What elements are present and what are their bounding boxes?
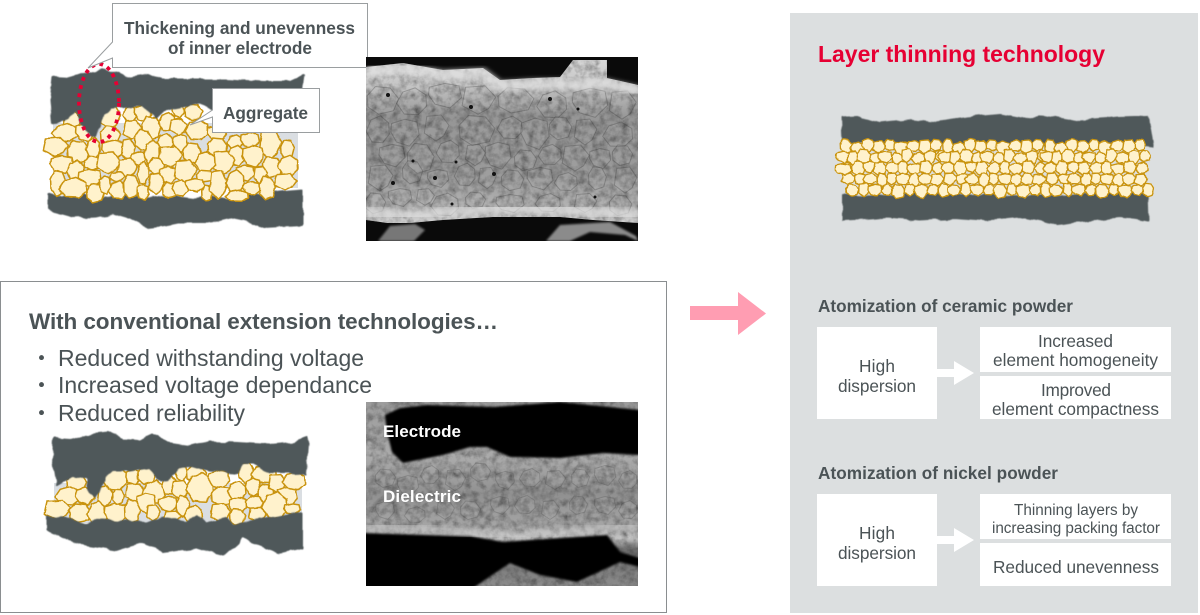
callout: thickening and unevenness	[88, 4, 368, 68]
upper electrode	[53, 433, 308, 497]
box: packing factor: Thinning layers by	[1014, 502, 1138, 519]
callout: aggregate: Aggregate	[223, 103, 308, 123]
panel: conventional extension technologies	[0, 282, 666, 612]
red dotted ellipse	[79, 64, 119, 142]
callout: thickening and unevenness: of inner electrode	[168, 38, 312, 58]
box: element homogeneity	[980, 327, 1171, 372]
box: high dispersion: dispersion	[838, 543, 916, 563]
panel: layer thinning technology	[790, 13, 1198, 613]
box: high dispersion	[817, 494, 937, 586]
diagram: thin layer with conventional technology	[44, 433, 308, 555]
heading: With conventional extension technologies…	[29, 309, 498, 334]
white arrow	[937, 361, 974, 385]
bullet list: Reduced reliability	[58, 400, 246, 426]
box: element compactness: Improved	[1041, 380, 1111, 400]
label: Electrode: Electrode	[383, 422, 461, 441]
lower black electrode area	[364, 533, 640, 588]
diagram: thick dielectric with aggregate	[43, 64, 303, 227]
section: nickel powder	[817, 463, 1171, 586]
lower electrode	[50, 190, 302, 227]
upper electrode with protrusion	[51, 70, 303, 135]
ceramic grains	[43, 104, 298, 202]
bullet list: ・	[30, 400, 53, 426]
diagram: thinned layer	[835, 115, 1154, 224]
callout: aggregate	[190, 88, 320, 132]
box: element homogeneity: Increased	[1038, 331, 1113, 351]
box: element homogeneity: element homogeneity	[993, 350, 1158, 370]
ceramic grains	[44, 462, 305, 525]
bullet list	[30, 345, 372, 426]
white arrow	[937, 528, 974, 552]
title: Layer thinning technology	[818, 41, 1105, 67]
dielectric background	[54, 483, 302, 523]
box: packing factor	[980, 494, 1171, 539]
upper black electrode area	[385, 402, 640, 463]
box: high dispersion: dispersion	[838, 376, 916, 396]
box: element compactness	[980, 376, 1171, 419]
box: high dispersion	[817, 327, 937, 419]
arrow	[690, 292, 766, 335]
callout: thickening and unevenness: Thickening and unevenness	[124, 18, 355, 38]
label: Dielectric: Dielectric	[383, 487, 461, 506]
micrograph: conventional layer with labels	[364, 402, 640, 588]
dielectric background	[53, 123, 298, 188]
box: packing factor: increasing packing factor	[992, 520, 1160, 537]
box: high dispersion: High	[859, 356, 895, 376]
micrograph: conventional dielectric layer	[365, 57, 638, 241]
bullet list: Increased voltage dependance	[58, 372, 372, 398]
bullet list: ・	[30, 372, 53, 398]
bullet list: ・	[30, 345, 53, 371]
ceramic grains	[835, 139, 1154, 198]
section: nickel powder: Atomization of nickel powder	[818, 463, 1058, 483]
lower electrode	[47, 513, 302, 555]
section: ceramic powder	[817, 296, 1171, 419]
box: high dispersion: High	[859, 523, 895, 543]
section: ceramic powder: Atomization of ceramic powder	[818, 296, 1073, 316]
box: element compactness: element compactness	[992, 399, 1159, 419]
box: reduced unevenness	[980, 543, 1171, 586]
box: reduced unevenness: Reduced unevenness	[993, 557, 1159, 577]
bullet list: Reduced withstanding voltage	[58, 345, 364, 371]
